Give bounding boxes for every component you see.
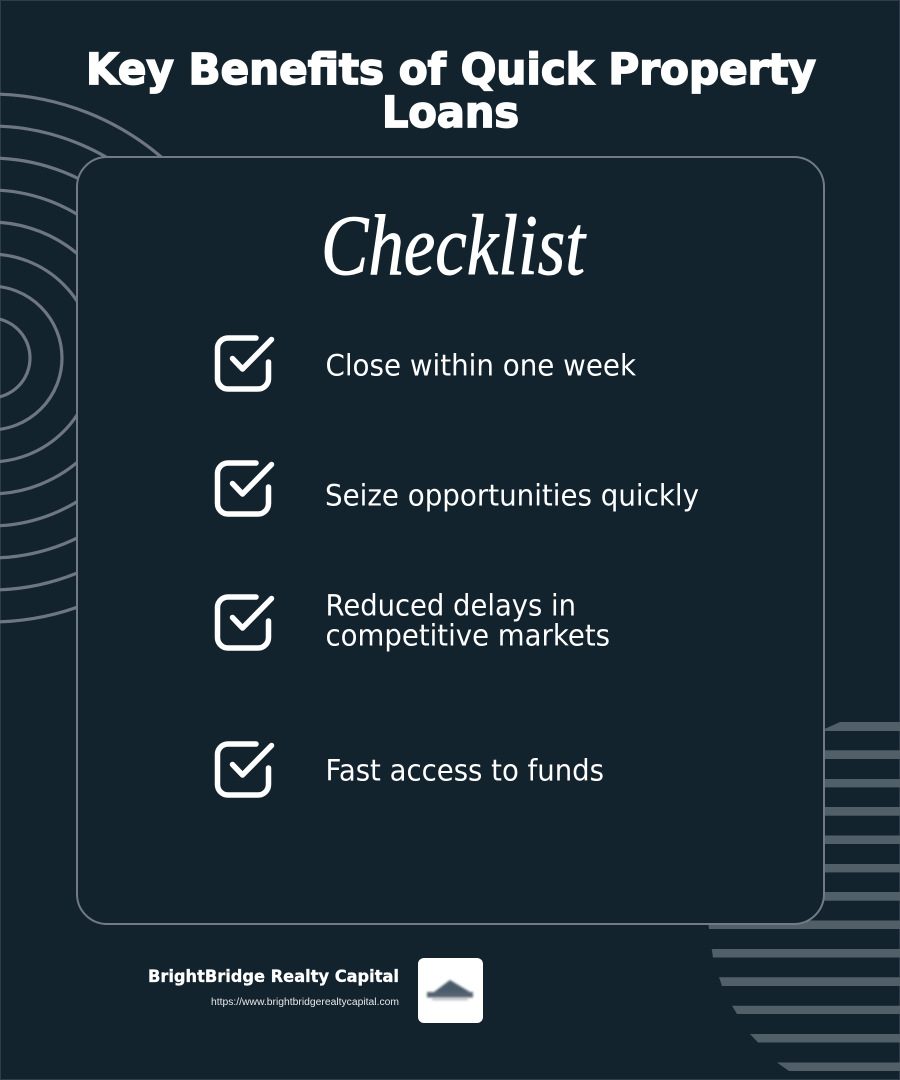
item text: Reduced delays in (326, 588, 576, 622)
item: close within one week (218, 338, 636, 389)
checklist heading: Checklist (321, 197, 587, 293)
item text: Close within one week (326, 348, 636, 382)
panel background (77, 157, 824, 924)
decorative concentric circles (0, 94, 254, 622)
item text: Seize opportunities quickly (325, 478, 699, 512)
footer: company name: BrightBridge Realty Capital (148, 967, 399, 987)
item text (326, 588, 610, 652)
icon: checkbox (218, 463, 272, 514)
decorative horizontal stripes (708, 722, 900, 1071)
icon: checkbox (218, 597, 272, 648)
icon: checkbox (218, 744, 272, 795)
logo (418, 958, 483, 1023)
item: fast access to funds (218, 744, 604, 795)
item text: Fast access to funds (326, 754, 604, 788)
panel: checklist (77, 157, 824, 924)
item text: competitive markets (326, 618, 610, 652)
title: Loans (382, 88, 519, 138)
footer: website url: https://www.brightbridgerealtycapital.com (211, 997, 399, 1008)
icon: checkbox (218, 338, 272, 389)
title (86, 45, 816, 138)
item: seize opportunities quickly (218, 463, 699, 514)
title: Key Benefits of Quick Property (86, 45, 816, 95)
item: reduced delays in competitive markets (218, 588, 610, 652)
